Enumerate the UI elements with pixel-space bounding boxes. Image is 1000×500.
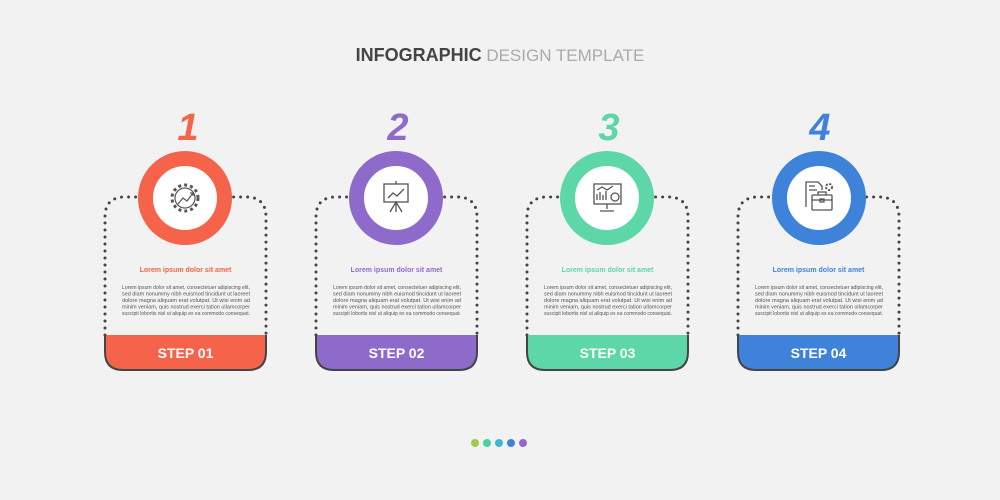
panel: step 1: STEP 01 <box>158 345 214 361</box>
panel: step 3: 3 <box>598 107 620 149</box>
icon: presentation board <box>384 181 408 212</box>
pagination dots <box>471 439 527 447</box>
title: INFOGRAPHIC DESIGN TEMPLATE <box>356 45 644 65</box>
panel: step 4: 4 <box>808 107 831 149</box>
panel: step 2: Lorem ipsum dolor sit amet <box>351 267 443 274</box>
panel: step 3: STEP 03 <box>580 345 636 361</box>
panel: step 4 <box>738 107 899 370</box>
panel: step 3 <box>527 107 688 370</box>
panel: step 2: 2 <box>386 107 409 149</box>
panel: step 2 <box>316 107 477 370</box>
panel: step 1: 1 <box>177 107 199 149</box>
panel: step 3: Lorem ipsum dolor sit amet <box>562 267 654 274</box>
icon: briefcase document <box>806 182 832 210</box>
icon: monitor chart <box>594 184 621 211</box>
icon: gear chart <box>172 185 198 211</box>
panel: step 1: Lorem ipsum dolor sit amet <box>140 267 232 274</box>
panel: step 2: STEP 02 <box>369 345 425 361</box>
panel: step 1 <box>105 107 266 370</box>
panel: step 4: Lorem ipsum dolor sit amet <box>773 267 865 274</box>
panel: step 4: STEP 04 <box>791 345 847 361</box>
